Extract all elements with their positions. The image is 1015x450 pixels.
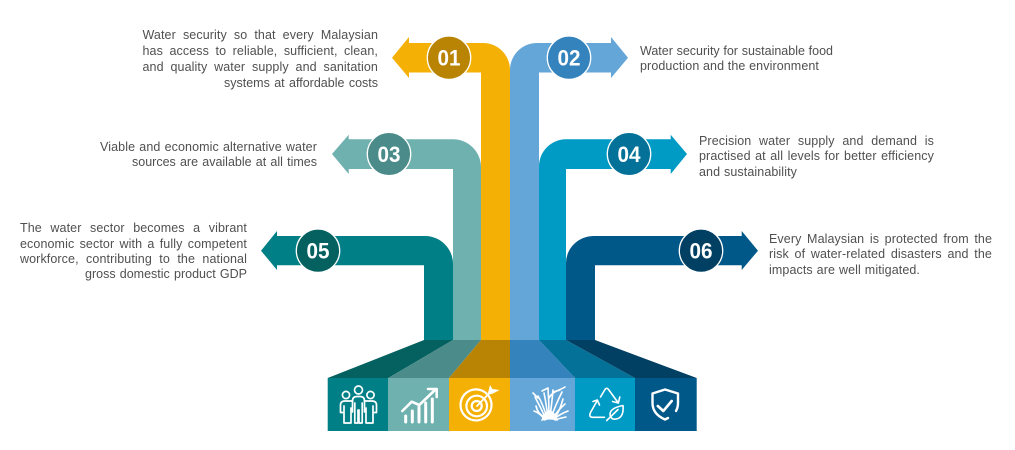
icon: people <box>340 386 376 423</box>
icon: water plant <box>533 387 568 421</box>
text: and quality water supply and sanitation <box>142 60 378 74</box>
icon: target <box>461 385 500 420</box>
icon: shield check <box>652 390 678 420</box>
arrow 03 <box>332 132 481 340</box>
icon: recycle leaf <box>590 388 623 420</box>
text: Water security for sustainable food <box>640 44 833 58</box>
arrow 06: 06 <box>690 239 712 264</box>
text block 06 <box>769 232 992 277</box>
text block 02 <box>640 44 833 73</box>
text: and sustainability <box>699 165 797 179</box>
text block 01 <box>142 28 378 90</box>
base colour blocks <box>328 378 697 431</box>
arrow 02 <box>510 36 628 340</box>
text block 05 <box>20 221 247 281</box>
arrow 04 <box>539 132 687 340</box>
arrow 05: 05 <box>306 239 330 264</box>
arrow 01: 01 <box>438 46 460 71</box>
arrow 01 <box>392 36 510 340</box>
text: Water security so that every Malaysian <box>142 28 378 42</box>
text: Precision water supply and demand is <box>699 134 934 148</box>
arrow 02: 02 <box>558 46 580 71</box>
text: production and the environment <box>640 59 819 73</box>
arrow 04: 04 <box>618 142 641 167</box>
icon: growth chart <box>402 389 437 422</box>
text block 04 <box>699 134 934 179</box>
text: The water sector becomes a vibrant <box>20 221 247 235</box>
text: Viable and economic alternative water <box>100 140 317 154</box>
text: economic sector with a fully competent <box>20 237 247 251</box>
text: practised at all levels for better efficiency <box>699 149 934 163</box>
arrow 06 <box>566 229 758 340</box>
text: has access to reliable, sufficient, clean, <box>142 44 378 58</box>
base fan <box>328 340 697 378</box>
arrow 05 <box>261 229 453 340</box>
text: gross domestic product GDP <box>85 267 247 281</box>
text: risk of water-related disasters and the <box>769 247 992 261</box>
text: sources are available at all times <box>132 155 317 169</box>
text block 03 <box>100 140 317 169</box>
arrow 03: 03 <box>378 142 400 167</box>
text: systems at affordable costs <box>224 76 378 90</box>
text: impacts are well mitigated. <box>769 263 920 277</box>
text: Every Malaysian is protected from the <box>769 232 992 246</box>
text: workforce, contributing to the national <box>20 252 247 266</box>
